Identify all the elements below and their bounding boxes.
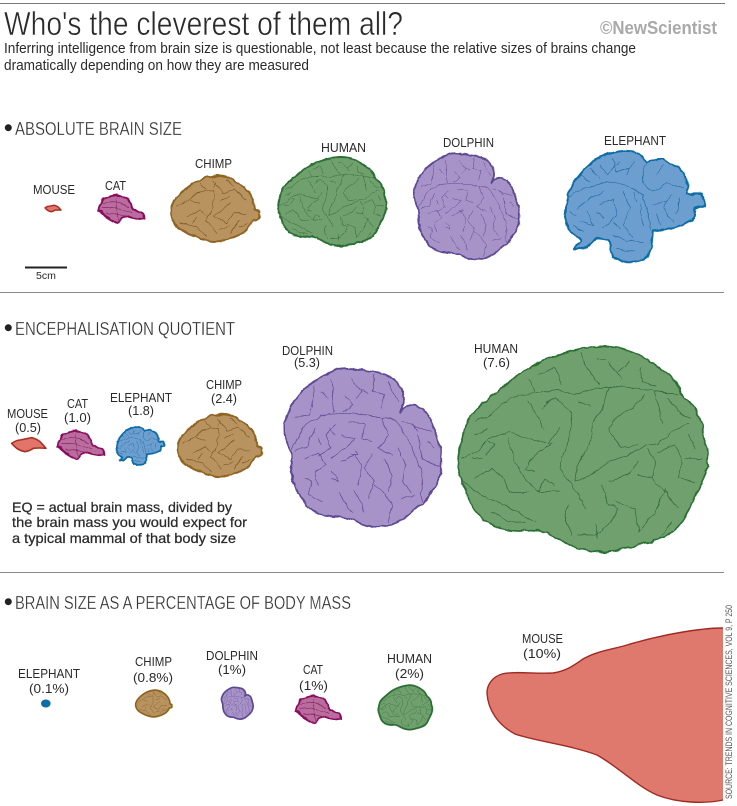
elephant brain and label: ELEPHANT [110,390,172,405]
EQ definition text: the brain mass you would expect for [12,514,247,530]
chimp brain and label [171,156,259,241]
chimp brain and label: CHIMP [135,654,172,669]
elephant brain and label: ELEPHANT [604,133,666,148]
mouse brain and label [33,182,75,212]
mouse brain and label: (10%) [523,646,561,661]
elephant brain and label [18,666,80,708]
human brain and label: HUMAN [321,140,366,155]
cat brain and label: CAT [67,396,88,411]
top rule [0,2,725,4]
heading: encephalisation quotient: ENCEPHALISATION QUOTIENT [15,319,235,339]
dolphin brain and label [414,135,519,259]
mouse brain and label [487,628,723,802]
EQ definition text [12,499,247,546]
dolphin brain and label: DOLPHIN [282,343,333,358]
elephant brain and label [110,390,172,465]
human brain and label: HUMAN [387,651,432,666]
EQ definition text: a typical mammal of that body size [12,530,236,546]
heading: absolute brain size: ABSOLUTE BRAIN SIZE [15,119,182,139]
elephant brain and label: (0.1%) [29,681,69,696]
scale bar: 5cm [25,268,67,282]
mouse brain and label [7,406,48,452]
chimp brain and label [133,654,173,717]
title: Who's the cleverest of them all? [4,5,403,42]
cat brain and label [295,662,341,723]
human brain and label: HUMAN [474,341,518,356]
dolphin brain and label [206,648,258,719]
heading: percentage of body mass: BRAIN SIZE AS A PERCENTAGE OF BODY MASS [15,593,351,613]
chimp brain and label: (2.4) [211,391,237,406]
chimp brain and label: CHIMP [206,377,242,392]
human brain and label [278,140,386,246]
subtitle [4,40,636,74]
source credit: SOURCE: TRENDS IN COGNITIVE SCIENCES, VOL 9, P 250 [724,605,734,799]
mouse brain and label: MOUSE [33,182,75,197]
panel: absolute brain size [5,119,706,282]
elephant brain and label: (1.8) [128,403,154,418]
mouse brain and label: (0.5) [15,420,41,435]
human brain and label: (7.6) [483,355,510,370]
subtitle: dramatically depending on how they are measured [4,57,309,74]
mouse brain and label: MOUSE [7,406,48,421]
subtitle: Inferring intelligence from brain size is questionable, not least because the relative sizes of brains change [4,40,636,57]
cat brain and label [98,178,144,222]
human brain and label [378,651,432,730]
EQ definition text: EQ = actual brain mass, divided by [12,499,232,515]
dolphin brain and label [282,343,442,527]
chimp brain and label: CHIMP [195,156,232,171]
dolphin brain and label: (1%) [218,662,246,677]
dolphin brain and label: DOLPHIN [443,135,494,150]
dolphin brain and label: DOLPHIN [206,648,258,663]
panel: brain size as a percentage of body mass [5,593,723,802]
chimp brain and label: (0.8%) [133,670,173,685]
elephant brain and label: ELEPHANT [18,666,80,681]
panel: encephalisation quotient [5,319,708,552]
logo: New Scientist: ©NewScientist [600,18,717,38]
elephant brain and label [565,133,706,262]
scale bar: 5cm: 5cm [36,271,56,282]
dolphin brain and label: (5.3) [294,355,320,370]
cat brain and label: CAT [105,178,126,193]
human brain and label [458,341,708,552]
human brain and label: (2%) [395,666,424,681]
mouse brain and label: MOUSE [522,631,563,646]
cat brain and label: CAT [303,662,323,677]
cat brain and label: (1%) [299,678,328,693]
cat brain and label: (1.0) [64,410,91,425]
cat brain and label [57,396,104,459]
chimp brain and label [177,377,262,477]
